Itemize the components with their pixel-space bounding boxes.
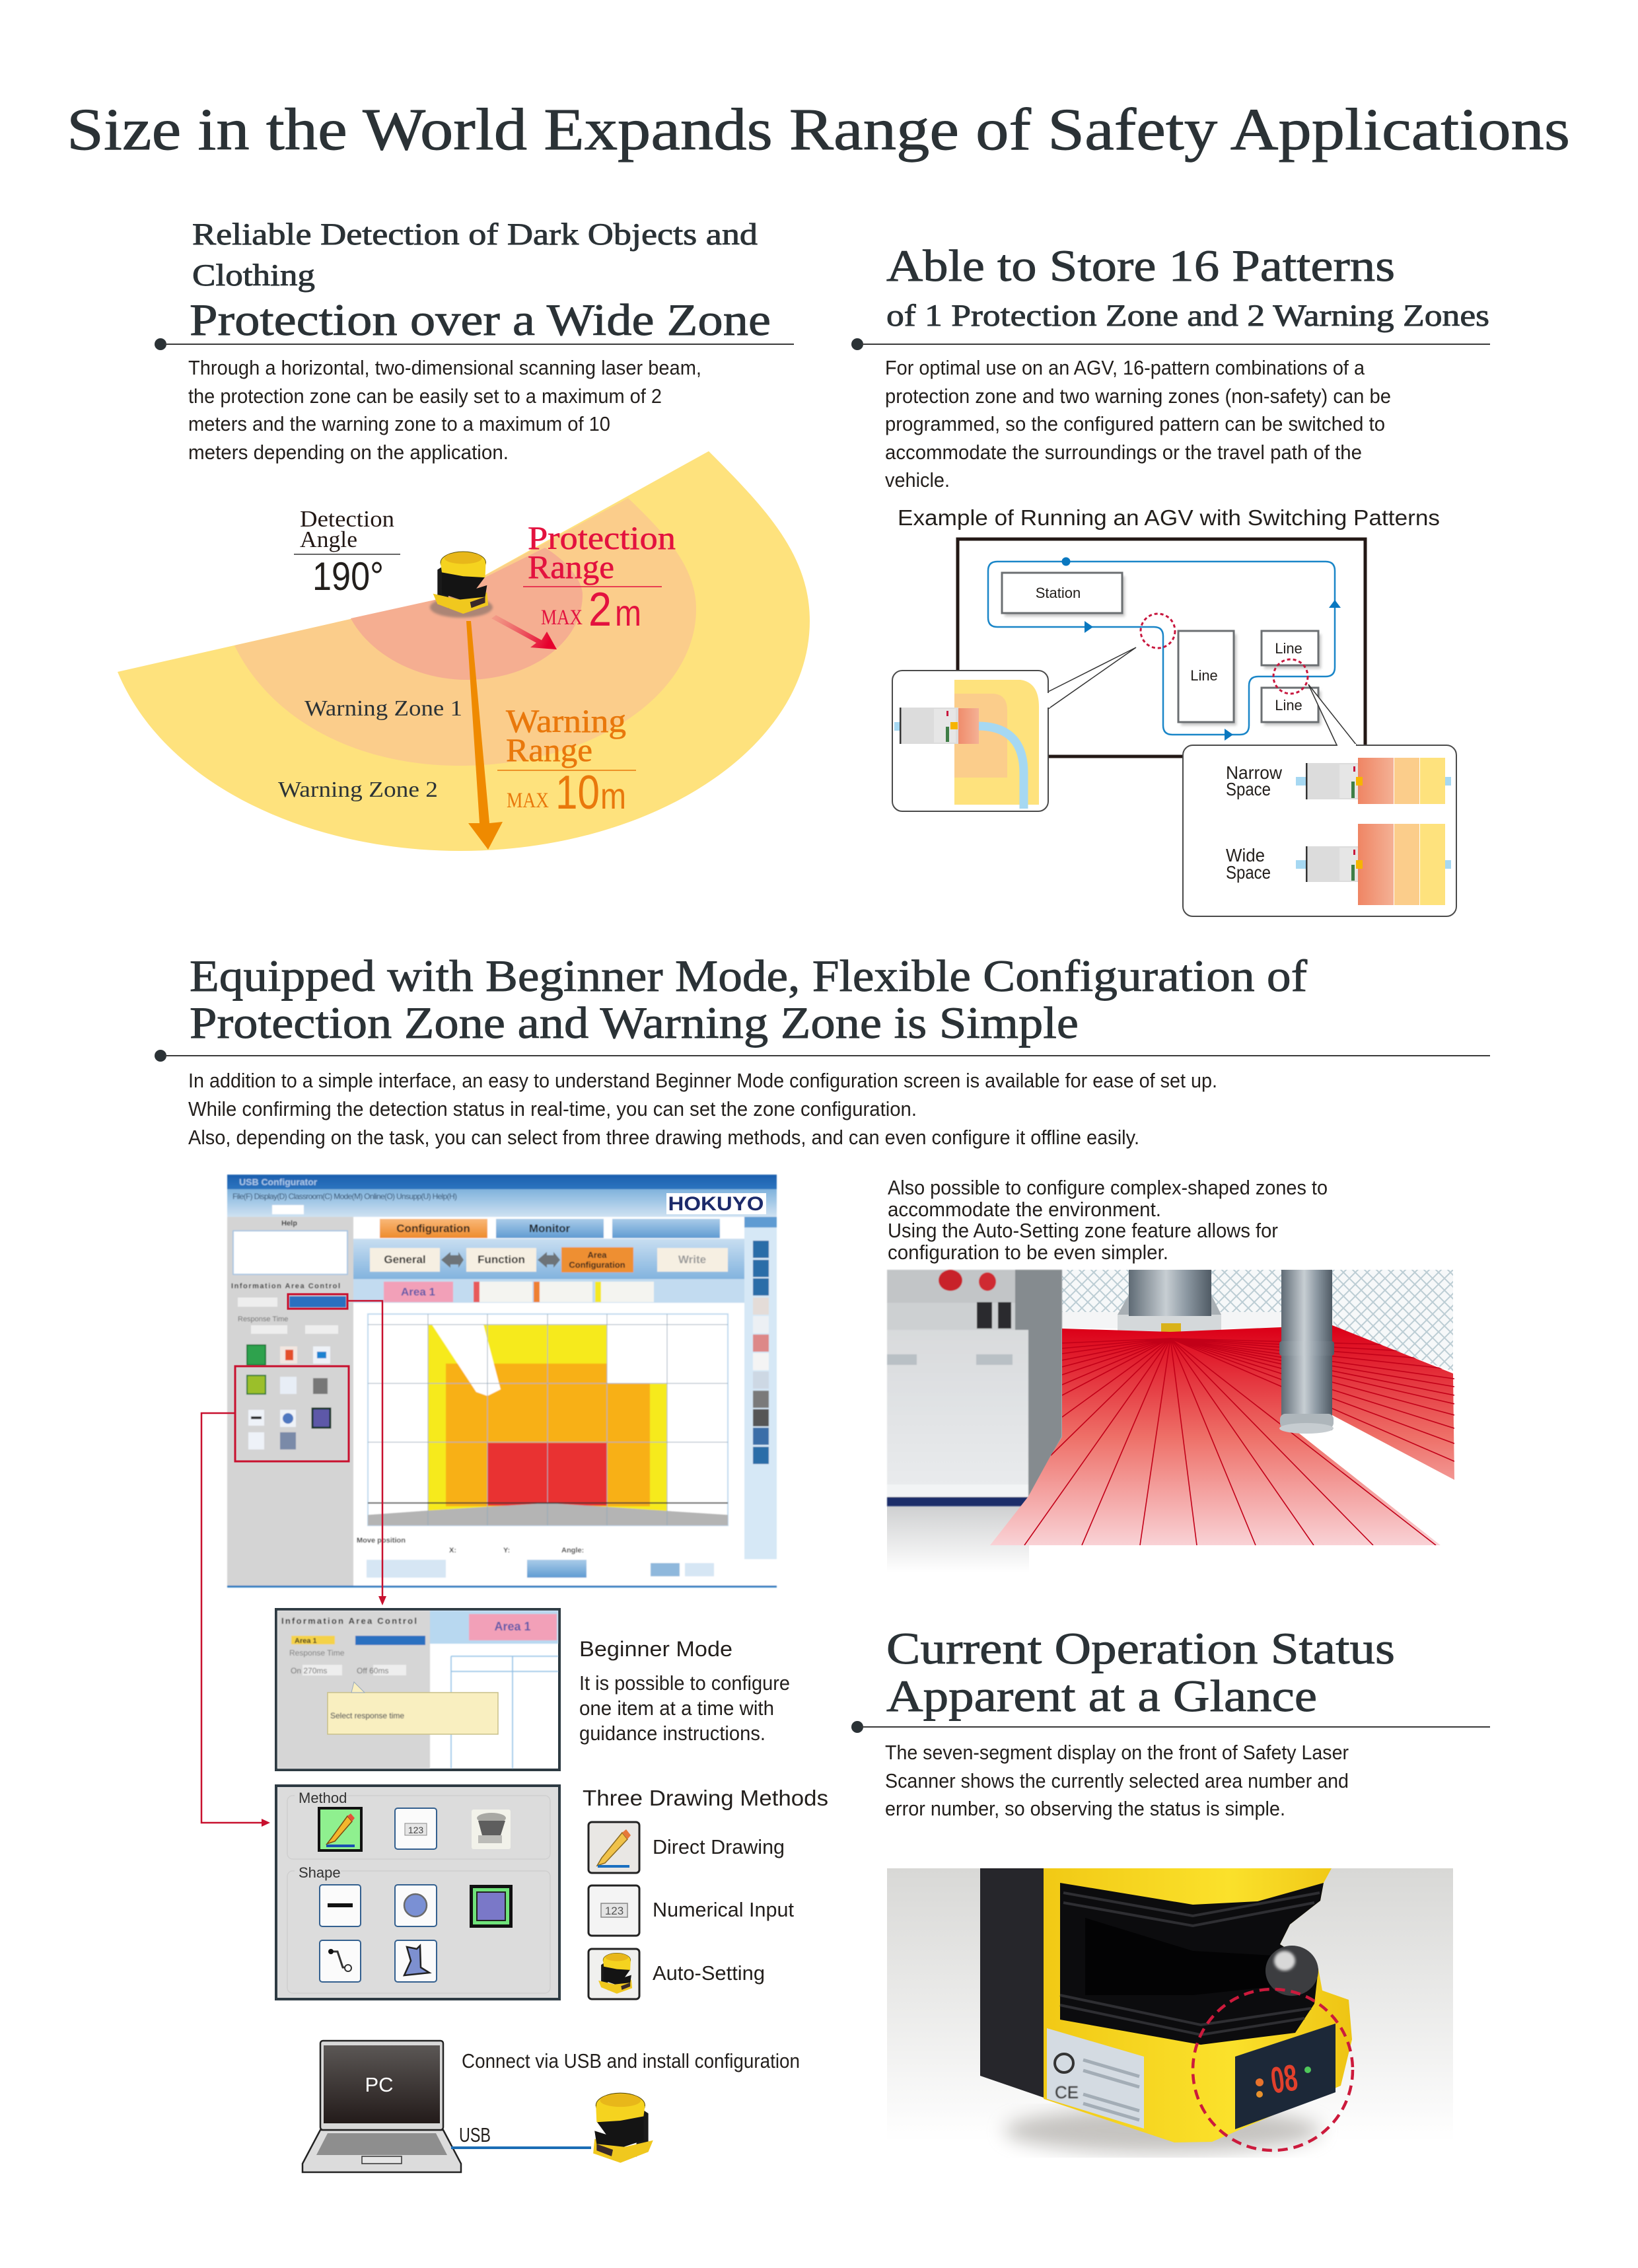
heading: protection over a wide zone [155, 217, 794, 350]
heading: current operation status: Apparent at a Glance [886, 1671, 1317, 1721]
text block: operation status: The seven-segment display on the front of Safety Laser [885, 1741, 1349, 1764]
chart: detection fan diagram [118, 451, 810, 851]
scanner yellow body [1044, 1868, 1352, 2142]
warning range label [497, 702, 636, 819]
protection zone sector [351, 548, 583, 680]
step row [353, 1239, 744, 1279]
text block: beginner mode description: In addition to a simple interface, an easy to understand Beginner Mode configuration screen is available for ease of set up. [188, 1069, 1217, 1092]
text block: wide zone description: the protection zone can be easily set to a maximum of 2 [188, 384, 662, 408]
screenshot: configurator software: USB Configurator [239, 1177, 318, 1187]
dashed highlight circle [1193, 1989, 1353, 2150]
USB cable [451, 2146, 591, 2149]
icon: polyline [320, 1940, 361, 1982]
seven-segment display panel: 08 [1268, 2057, 1300, 2101]
detection angle label [294, 506, 400, 599]
screenshot: configurator software: General [384, 1253, 426, 1266]
heading: current operation status: Current Operation Status [886, 1623, 1395, 1673]
zone labels: Warning Zone 2 [278, 778, 438, 802]
text block: wide zone description: meters and the warning zone to a maximum of 10 [188, 412, 610, 435]
area row [353, 1279, 744, 1303]
arrow: protection range [491, 615, 557, 649]
line block upper [1262, 631, 1321, 669]
fence background [1062, 1270, 1453, 1313]
text block: pattern description: accommodate the surroundings or the travel path of the [885, 441, 1362, 464]
text block: beginner mode: Beginner Mode [579, 1637, 732, 1661]
panel: beginner mode screenshot: Area 1 [494, 1620, 531, 1633]
icon: scanner [593, 2093, 653, 2163]
legend: three drawing methods [583, 1786, 828, 1999]
icon: laptop [303, 2041, 461, 2172]
seven-segment display panel [1235, 2024, 1335, 2129]
illustration: laptop and USB connection: USB [459, 2123, 491, 2146]
icon: freeform [395, 1940, 437, 1982]
narrow space [1226, 758, 1451, 804]
diagram: AGV route [958, 539, 1365, 756]
text block: operation status [885, 1741, 1349, 1820]
warning zone 2 sector [118, 451, 810, 851]
callout: curve pattern [892, 647, 1136, 811]
text block: beginner mode description: Also, depending on the task, you can select from three drawing methods, and can even configure it offline easily. [188, 1126, 1139, 1149]
panel: beginner mode screenshot: Information Area Control [281, 1616, 417, 1626]
screenshot: configurator software: Y: [503, 1547, 510, 1555]
heading: protection over a wide zone: Clothing [192, 258, 315, 293]
text block: complex zones: Also possible to configure complex-shaped zones to [888, 1176, 1328, 1199]
heading: beginner mode: Protection Zone and Warning Zone is Simple [190, 998, 1079, 1048]
back pillar and scanner mount [1118, 1270, 1221, 1333]
icon: numeric: 123 [408, 1825, 423, 1835]
screenshot: configurator software: Monitor [529, 1222, 571, 1235]
illustration: laptop and USB connection [303, 2041, 800, 2172]
red floor zone [990, 1327, 1441, 1545]
icon: pencil selected [319, 1808, 361, 1850]
icon: numeric [395, 1808, 437, 1849]
text block: operation status: error number, so observing the status is simple. [885, 1797, 1285, 1820]
text block: beginner mode: It is possible to configure [579, 1671, 790, 1695]
route path [988, 562, 1335, 735]
heading: beginner mode: Equipped with Beginner Mode, Flexible Configuration of [190, 951, 1307, 1001]
wide space [1226, 824, 1451, 905]
title: Size in the World Expands Range of Safety Applications [67, 97, 1570, 163]
legend: three drawing methods: Auto-Setting [653, 1961, 765, 1985]
photo: scanner closeup [887, 1868, 1453, 2172]
right toolbar [744, 1217, 777, 1559]
screenshot: configurator software: Information Area Control [231, 1282, 340, 1290]
heading: able to store 16 patterns: of 1 Protection Zone and 2 Warning Zones [886, 299, 1489, 333]
connection note: Connect via USB and install configuration [462, 2049, 800, 2072]
icon: circle [395, 1885, 437, 1926]
heading: able to store 16 patterns: Able to Store 16 Patterns [886, 240, 1395, 291]
icon: numerical input [588, 1885, 639, 1936]
panel: method and shape icons: Method [299, 1790, 347, 1806]
cabinet [887, 1270, 1062, 1506]
protection range label: Range [528, 548, 614, 585]
screenshot: configurator software: Configuration [396, 1222, 470, 1235]
left panel [227, 1217, 353, 1586]
zone labels: Warning Zone 1 [304, 696, 462, 721]
detection angle label: Angle [300, 527, 357, 552]
narrow space: Narrow [1226, 762, 1283, 783]
screenshot: configurator software: Angle: [561, 1547, 584, 1555]
screenshot: configurator software: Response Time [238, 1315, 288, 1323]
text block: pattern description: programmed, so the configured pattern can be switched to [885, 412, 1385, 435]
panel: method and shape icons [276, 1786, 559, 1999]
text block: complex zones: accommodate the environment. [888, 1198, 1161, 1221]
wide space: Space [1226, 862, 1271, 883]
panel: method and shape icons: Shape [299, 1864, 341, 1881]
tooltip: Select response time [330, 1711, 404, 1720]
arrow: to method panel [201, 1413, 270, 1827]
floor fade [887, 1506, 1029, 1572]
heading: current operation status [851, 1623, 1490, 1733]
heading: protection over a wide zone: Reliable Detection of Dark Objects and [192, 217, 758, 252]
legend: three drawing methods: Direct Drawing [653, 1835, 785, 1858]
wide space: Wide [1226, 845, 1265, 865]
tabs [380, 1219, 487, 1238]
icon: square selected [470, 1885, 513, 1928]
front pillar [1279, 1270, 1334, 1434]
warning zone 1 sector [234, 498, 696, 766]
text block: beginner mode description: While confirming the detection status in real-time, you can set the zone configuration. [188, 1097, 917, 1120]
screenshot: configurator software: Configuration [569, 1260, 625, 1270]
text block: beginner mode description [188, 1069, 1217, 1149]
scanner window [1060, 1883, 1324, 2045]
protection range label: 2 [588, 583, 612, 636]
HOKUYO logo: HOKUYO [668, 1193, 764, 1215]
tooltip [328, 1682, 498, 1734]
text block: complex zones: Using the Auto-Setting zone feature allows for [888, 1219, 1278, 1242]
detection angle label: 190° [312, 554, 384, 599]
warning range label: Warning [506, 702, 626, 739]
legend: three drawing methods: Numerical Input [653, 1898, 794, 1921]
icon: scanner [430, 552, 493, 618]
screenshot: configurator software: Write [678, 1253, 706, 1266]
text block: pattern description: protection zone and two warning zones (non-safety) can be [885, 384, 1391, 408]
station [1002, 573, 1125, 616]
heading: beginner mode [155, 951, 1490, 1062]
scanner lens [1265, 1946, 1318, 1996]
subheading: AGV example: Example of Running an AGV with Switching Patterns [898, 505, 1440, 530]
icon: direct drawing [588, 1822, 639, 1873]
panel: beginner mode screenshot: On 270ms [291, 1666, 327, 1675]
panel: beginner mode screenshot [276, 1609, 559, 1770]
text block: beginner mode: one item at a time with [579, 1697, 774, 1720]
line block lower [1262, 688, 1321, 725]
text block: complex zones [888, 1176, 1328, 1264]
warning range label: m [600, 775, 626, 817]
illustration: laser zone in factory [887, 1270, 1454, 1572]
line block lower: Line [1275, 697, 1302, 713]
legend: three drawing methods: Three Drawing Methods [583, 1786, 828, 1810]
screenshot: configurator software: Area 1 [401, 1286, 435, 1298]
screenshot: configurator software [227, 1175, 777, 1588]
scanner back [980, 1868, 1044, 2098]
arrow: warning range [466, 621, 503, 850]
icon: auto-setting [588, 1949, 639, 1999]
text block: beginner mode: guidance instructions. [579, 1722, 766, 1745]
panel: beginner mode screenshot: Off 60ms [357, 1666, 388, 1675]
text block: pattern description: For optimal use on an AGV, 16-pattern combinations of a [885, 356, 1365, 379]
text block: wide zone description [188, 356, 701, 464]
panel: beginner mode screenshot: Response Time [289, 1648, 345, 1658]
text block: operation status: Scanner shows the currently selected area number and [885, 1769, 1349, 1792]
warning range label: 10 [555, 766, 600, 819]
specification label: CE [1055, 2082, 1079, 2102]
specification label [1047, 2028, 1144, 2129]
icon: laptop: PC [365, 2073, 394, 2096]
screenshot: configurator software: File(F) Display(D) Classroom(C) Mode(M) Online(O) Unsupp(U) Help(H) [232, 1192, 457, 1201]
text block: pattern description: vehicle. [885, 468, 950, 492]
detection angle label: Detection [300, 506, 394, 532]
protection range label [523, 519, 676, 636]
icon: scanner greyed [472, 1810, 511, 1849]
protection range label: Protection [528, 519, 676, 556]
zone labels [278, 696, 462, 802]
icon: numerical input: 123 [605, 1905, 623, 1917]
factory frame [958, 539, 1365, 756]
text block: wide zone description: meters depending on the application. [188, 441, 509, 464]
zone chart [368, 1314, 728, 1525]
narrow space: Space [1226, 779, 1271, 799]
protection range label: MAX [541, 606, 583, 630]
screenshot: configurator software: Help [281, 1220, 297, 1227]
heading: able to store 16 patterns [851, 240, 1490, 350]
highlights [288, 1294, 347, 1309]
screenshot: configurator software: Function [478, 1253, 525, 1266]
text block: pattern description [885, 356, 1391, 492]
arrow: to beginner mode [347, 1301, 386, 1605]
line block center: Line [1190, 667, 1218, 684]
line block upper: Line [1275, 640, 1302, 657]
protection range label: m [615, 592, 641, 634]
line block center [1178, 631, 1236, 725]
laser rays [1024, 1338, 1454, 1545]
text block: wide zone description: Through a horizontal, two-dimensional scanning laser beam, [188, 356, 701, 379]
text block: complex zones: configuration to be even simpler. [888, 1241, 1168, 1264]
screenshot: configurator software: X: [449, 1547, 456, 1555]
callout: narrow and wide space patterns [1183, 684, 1456, 916]
lower controls: Move position [357, 1537, 406, 1545]
warning range label: Range [506, 731, 592, 768]
heading: protection over a wide zone: Protection over a Wide Zone [190, 295, 771, 345]
warning range label: MAX [507, 789, 549, 813]
switch point circles [1141, 614, 1175, 648]
station: Station [1036, 585, 1081, 601]
screenshot: configurator software: Area [588, 1250, 607, 1260]
panel: beginner mode screenshot: Area 1 [295, 1637, 317, 1645]
text block: beginner mode [579, 1637, 790, 1745]
icon: line [320, 1885, 361, 1926]
